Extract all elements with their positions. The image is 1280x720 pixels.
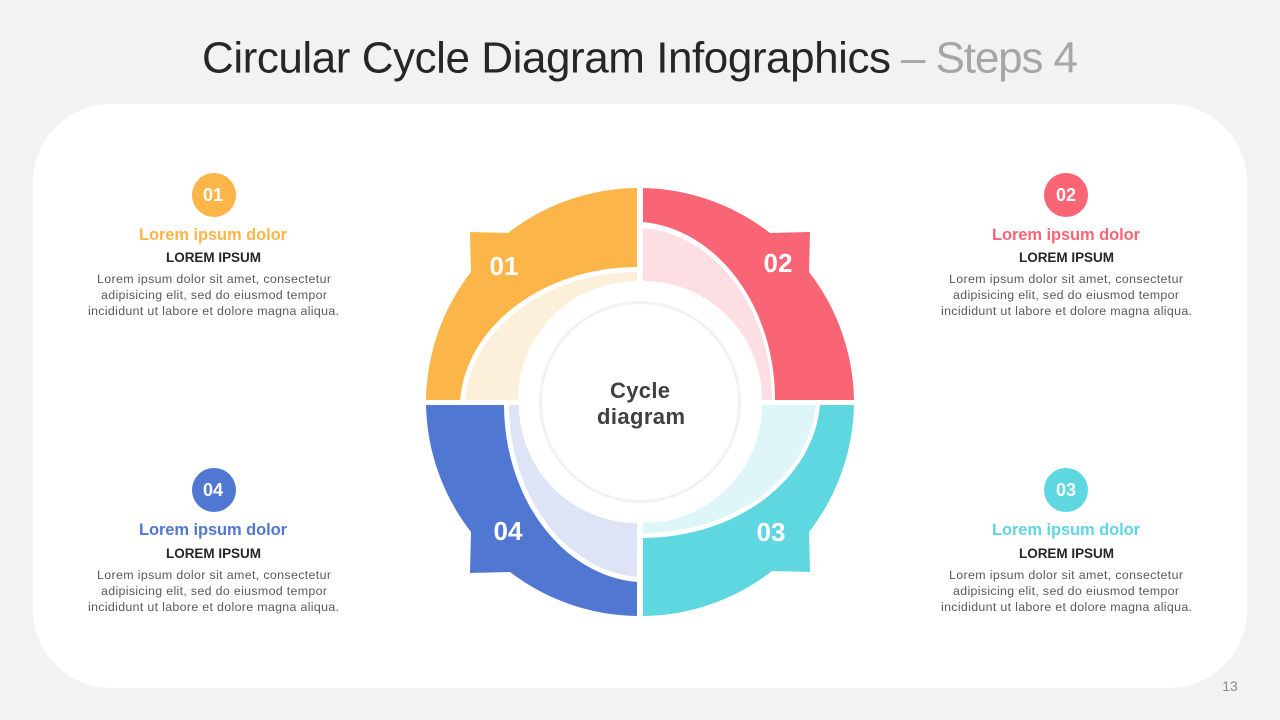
segment 01 inner [465, 272, 637, 400]
body 04: incididunt ut labore et dolore magna aliqua. [88, 600, 339, 614]
centre label: Cycle [610, 378, 670, 403]
page number: 13 [1222, 678, 1238, 694]
badge number 03: 03 [1056, 480, 1076, 500]
segment 03 outer [643, 405, 854, 616]
body 03: Lorem ipsum dolor sit amet, consectetur [949, 568, 1183, 582]
subheading 03: LOREM IPSUM [1019, 546, 1114, 561]
segment 03 inner [643, 405, 816, 533]
panel: white card [33, 104, 1247, 688]
segment 02 outer [643, 188, 854, 400]
badge number 02: 02 [1056, 185, 1076, 205]
badge 02 [1044, 173, 1088, 217]
subheading 01: LOREM IPSUM [166, 250, 261, 265]
body 04: Lorem ipsum dolor sit amet, consectetur [97, 568, 331, 582]
badge 03 [1044, 468, 1088, 512]
centre label: diagram [597, 404, 685, 429]
cycle diagram [426, 188, 854, 616]
body 01: Lorem ipsum dolor sit amet, consectetur [97, 272, 331, 286]
badge 01 [192, 173, 236, 217]
segment number 03: 03 [757, 517, 785, 547]
segment 01 outer [426, 188, 637, 400]
text block 02 [941, 173, 1192, 318]
heading 02: Lorem ipsum dolor [992, 226, 1141, 244]
heading 03: Lorem ipsum dolor [992, 521, 1141, 539]
title: – Steps 4 [901, 34, 1078, 82]
body 02: adipisicing elit, sed do eiusmod tempor [953, 288, 1179, 302]
subheading 02: LOREM IPSUM [1019, 250, 1114, 265]
badge number 01: 01 [203, 185, 223, 205]
text block 04 [88, 468, 339, 614]
body 01: adipisicing elit, sed do eiusmod tempor [101, 288, 327, 302]
badge number 04: 04 [203, 480, 223, 500]
segment number 02: 02 [764, 248, 792, 278]
segment number 04: 04 [494, 516, 523, 546]
segment 02 inner [643, 228, 772, 400]
body 03: incididunt ut labore et dolore magna aliqua. [941, 600, 1192, 614]
centre ring [540, 302, 740, 502]
body 02: Lorem ipsum dolor sit amet, consectetur [949, 272, 1183, 286]
text block 01 [88, 173, 339, 318]
segment 04 inner [509, 405, 637, 577]
segment number 01: 01 [490, 251, 518, 281]
heading 01: Lorem ipsum dolor [139, 226, 288, 244]
title: Circular Cycle Diagram Infographics [202, 34, 891, 82]
body 04: adipisicing elit, sed do eiusmod tempor [101, 584, 327, 598]
text block 03 [941, 468, 1192, 614]
segment 04 outer [426, 405, 637, 616]
body 02: incididunt ut labore et dolore magna aliqua. [941, 304, 1192, 318]
badge 04 [192, 468, 236, 512]
heading 04: Lorem ipsum dolor [139, 521, 288, 539]
subheading 04: LOREM IPSUM [166, 546, 261, 561]
body 03: adipisicing elit, sed do eiusmod tempor [953, 584, 1179, 598]
body 01: incididunt ut labore et dolore magna aliqua. [88, 304, 339, 318]
